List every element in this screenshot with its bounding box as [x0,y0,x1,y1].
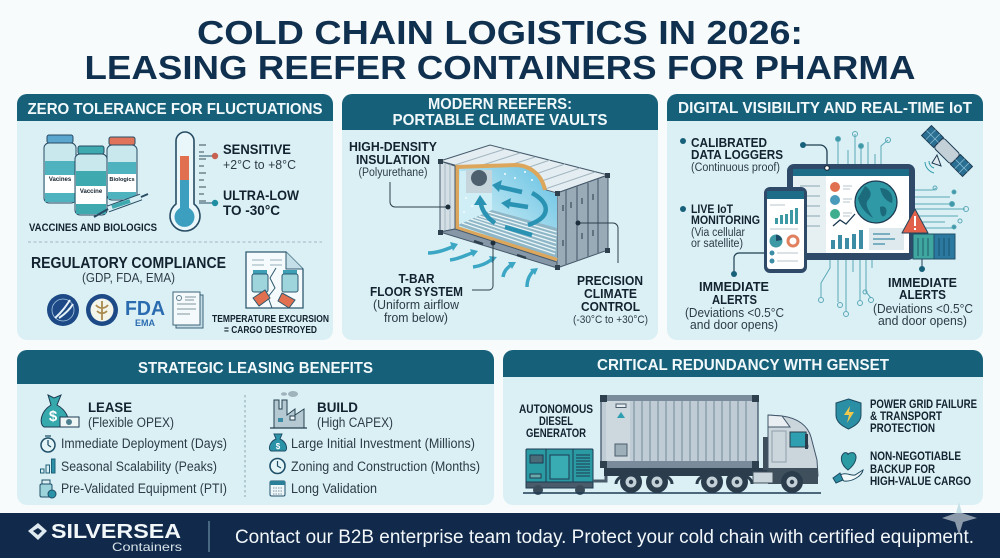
heading: modern reefers [342,94,658,130]
text: power grid failure: PROTECTION [870,421,935,435]
text: calibrated data loggers: (Continuous proof) [691,162,780,174]
circuit lines [800,132,968,316]
icon: clock [270,458,285,474]
text: non-negotiable backup [870,449,971,488]
text: t-bar floor system: from below) [384,311,448,325]
text: temperature excursion: TEMPERATURE EXCURSION [212,313,329,325]
label: vaccines and biologics: VACCINES AND BIOLOGICS [29,222,157,234]
text: high-density insulation: (Polyurethane) [358,167,428,179]
text: temperature excursion [212,313,329,336]
icon: investment bag: $ [276,442,281,451]
icon: regulator seals: EMA [135,318,156,328]
title: COLD CHAIN LOGISTICS IN 2026: [197,14,803,51]
text: lease: (Flexible OPEX) [88,415,174,430]
icon: shield [836,399,861,429]
list: lease benefits: Seasonal Scalability (Peaks) [61,459,217,474]
text: live iot monitoring: (Via cellular [691,227,745,239]
text: t-bar floor system [370,271,463,325]
icon: vaccine vials: Biologics [109,177,135,183]
heading: critical redundancy: CRITICAL REDUNDANCY WITH GENSET [597,357,889,374]
text: immediate alerts left [685,279,784,332]
list: build drawbacks: Zoning and Construction (Months) [291,459,480,474]
footer band [0,502,1000,558]
text: immediate alerts left: IMMEDIATE [699,279,769,294]
icon: regulator seals [47,294,165,328]
text: precision climate control: CONTROL [581,299,640,314]
text: immediate alerts left: (Deviations <0.5°C [685,306,784,320]
heading: modern reefers: MODERN REEFERS: [428,96,572,113]
leader: phone alert [731,253,764,277]
text: lease [88,399,174,430]
text: power grid failure [870,397,977,435]
text: non-negotiable backup: NON-NEGOTIABLE [870,449,961,463]
text: autonomous diesel generator: GENERATOR [526,428,587,440]
text: autonomous diesel generator: DIESEL [539,416,573,428]
text: immediate alerts right: (Deviations <0.5°C [873,302,973,316]
text: autonomous diesel generator [519,404,593,440]
text: precision climate control: PRECISION [577,273,643,288]
text: sensitive range: +2°C to +8°C [223,158,296,172]
text: ultra-low range: TO -30°C [223,202,280,218]
text: calibrated data loggers [680,135,783,174]
icon: money bag [41,395,79,427]
text: autonomous diesel generator: AUTONOMOUS [519,404,593,416]
icon: stopwatch [41,436,55,452]
text: t-bar floor system: (Uniform airflow [373,298,460,312]
heading: modern reefers: PORTABLE CLIMATE VAULTS [392,112,608,129]
panel: strategic leasing benefits [17,350,494,505]
list: lease benefits: Immediate Deployment (Days) [61,436,227,451]
text: calibrated data loggers: DATA LOGGERS [691,147,783,162]
heading: digital visibility: DIGITAL VISIBILITY AND REAL-TIME IoT [678,100,973,117]
icon: factory [270,391,307,428]
icon: certificate document [173,292,203,328]
sparkle mark [942,502,977,535]
logo mark [28,523,47,540]
text: sensitive range [223,141,296,172]
heading: digital visibility [667,94,983,121]
icon: vaccine vials: Vacines [49,177,72,183]
list: build drawbacks [269,434,480,496]
heading: zero tolerance [17,94,333,121]
text: regulatory compliance [31,255,226,285]
text: immediate alerts right: and door opens) [878,314,967,328]
text: non-negotiable backup: BACKUP FOR [870,462,935,476]
icon: containers [913,234,955,272]
text: lease: LEASE [88,399,132,415]
illustration: tablet dashboard [787,164,915,260]
leader: insulation [390,182,448,207]
text: live iot monitoring: LIVE IoT [691,202,734,216]
heading: zero tolerance: ZERO TOLERANCE FOR FLUCTUATIONS [28,101,323,118]
icon: money bag: $ [49,408,58,425]
icon: heart in hand [833,453,863,483]
text: live iot monitoring [680,202,760,250]
text: immediate alerts left: ALERTS [712,292,757,307]
panel: critical redundancy [503,350,983,505]
icon: vaccine vials: Vaccine [80,189,103,195]
list: build drawbacks: Large Initial Investment (Millions) [291,436,475,451]
icon: validated bottle [40,480,56,498]
logo: silversea containers [51,521,182,554]
text: precision climate control: CLIMATE [584,286,637,301]
illustration: diesel generator [526,449,606,495]
icon: warning triangle [902,209,928,233]
text: t-bar floor system: FLOOR SYSTEM [370,284,463,299]
call to action: Contact our B2B enterprise team today. Protect your cold chain with certified equipment. [235,527,974,548]
logo: silversea containers: SILVERSEA [51,521,181,543]
text: regulatory compliance: REGULATORY COMPLIANCE [31,255,226,272]
illustration: reefer container cutaway [428,145,610,287]
icon: vaccine vials [44,135,148,217]
panel: zero tolerance [17,94,333,340]
icon: thermometer [170,132,218,231]
text: live iot monitoring: or satellite) [691,238,743,250]
icon: investment bag [269,434,287,451]
text: temperature excursion: = CARGO DESTROYED [224,324,317,336]
text: live iot monitoring: MONITORING [691,213,760,227]
text: immediate alerts right: IMMEDIATE [888,275,957,290]
text: t-bar floor system: T-BAR [398,271,435,286]
icon: regulator seals: FDA [125,298,165,320]
icon: calendar [270,481,285,496]
panel: digital visibility [667,94,983,340]
text: high-density insulation: INSULATION [356,152,430,167]
icon: bars [40,459,55,473]
icon: damaged cargo document [246,252,303,308]
text: build [317,399,393,430]
text: non-negotiable backup: HIGH-VALUE CARGO [870,474,971,488]
text: precision climate control [573,273,648,326]
text: calibrated data loggers: CALIBRATED [691,135,767,150]
text: ultra-low range: ULTRA-LOW [223,187,300,203]
logo: silversea containers: Containers [112,540,182,554]
heading: strategic leasing benefits: STRATEGIC LEASING BENEFITS [138,360,373,377]
list: lease benefits: Pre-Validated Equipment (PTI) [61,481,227,496]
text: ultra-low range [223,187,300,218]
illustration: truck with container [523,395,821,493]
title: LEASING REEFER CONTAINERS FOR PHARMA [84,49,916,86]
text: high-density insulation [349,139,437,179]
text: immediate alerts right [873,275,973,328]
text: precision climate control: (-30°C to +30°C) [573,314,648,326]
list: build drawbacks: Long Validation [291,481,377,496]
text: build: BUILD [317,399,358,415]
text: power grid failure: POWER GRID FAILURE [870,397,977,411]
heading: strategic leasing benefits [17,350,494,384]
text: immediate alerts left: and door opens) [690,318,778,332]
leader: climate control [578,223,618,263]
text: power grid failure: & TRANSPORT [870,409,943,423]
text: sensitive range: SENSITIVE [223,141,291,157]
leader: t-bar floor [472,243,493,290]
text: build: (High CAPEX) [317,415,393,430]
icon: satellite [922,126,972,176]
text: high-density insulation: HIGH-DENSITY [349,139,437,154]
heading: critical redundancy [503,350,983,377]
panel: modern reefers [342,94,658,340]
text: immediate alerts right: ALERTS [899,287,946,302]
title [84,14,916,86]
list: lease benefits [40,436,227,498]
illustration: phone dashboard [764,187,807,273]
text: regulatory compliance: (GDP, FDA, EMA) [82,271,175,285]
